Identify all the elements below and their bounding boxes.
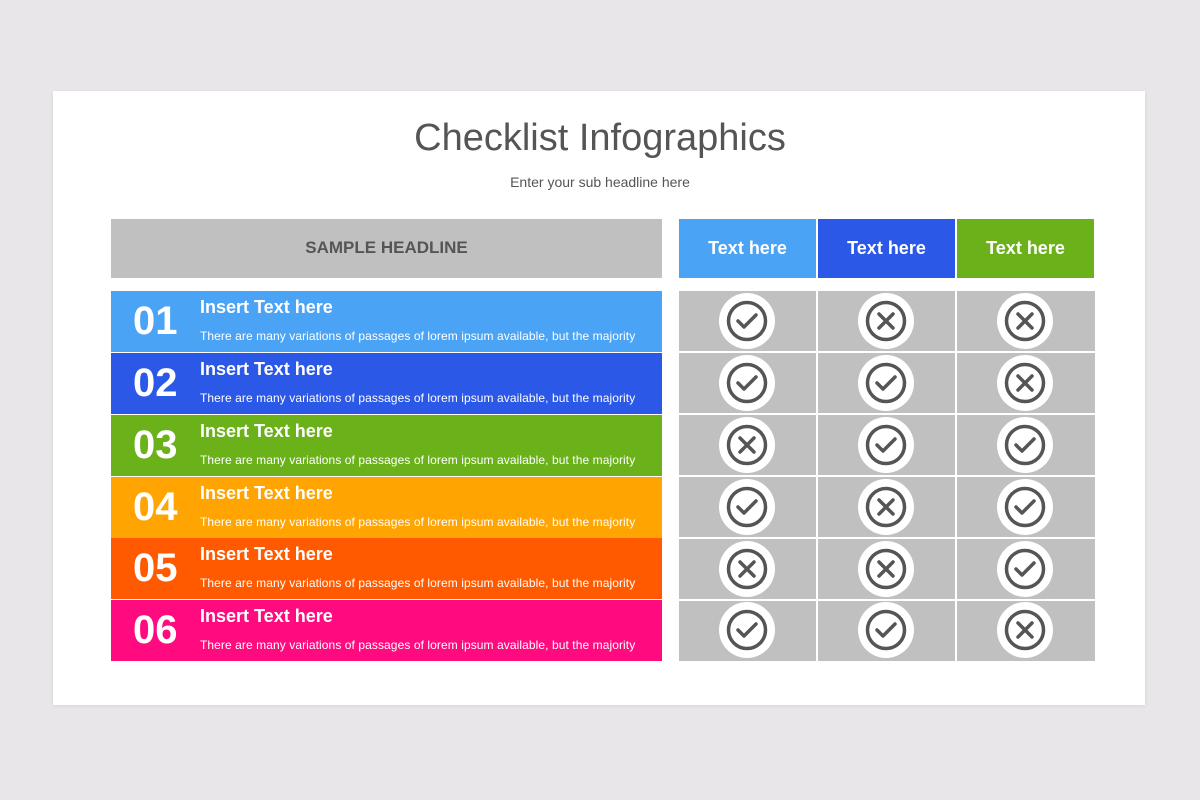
row 04: There are many variations of passages of lorem ipsum available, but the majority [200,515,635,529]
header 2: Text here [847,238,926,258]
row 01: Insert Text here [200,297,333,317]
row 05: Insert Text here [200,544,333,564]
icons row 5 [719,541,1053,597]
row 05: 05 [133,546,178,590]
title: Checklist Infographics [414,117,786,159]
row 03 [111,415,662,476]
row 01: There are many variations of passages of lorem ipsum available, but the majority [200,329,635,343]
row 02: 02 [133,361,178,405]
checklist grid [679,291,1095,661]
icons row 1 [719,293,1053,349]
row 04: Insert Text here [200,483,333,503]
row 06: 06 [133,608,178,652]
row 01 [111,291,662,352]
row 05 [111,538,662,599]
row 03: There are many variations of passages of lorem ipsum available, but the majority [200,453,635,467]
column headers [679,219,1094,278]
icons row 3 [719,417,1053,473]
icons row 4 [719,479,1053,535]
header 1: Text here [708,238,787,258]
row 04 [111,477,662,538]
header 3: Text here [986,238,1065,258]
row 04: 04 [133,485,178,529]
row 06 [111,600,662,661]
card [53,91,1145,705]
row 05: There are many variations of passages of lorem ipsum available, but the majority [200,576,635,590]
left header [111,219,662,278]
row 06: Insert Text here [200,606,333,626]
row 06: There are many variations of passages of lorem ipsum available, but the majority [200,638,635,652]
row 01: 01 [133,299,178,343]
row 03: Insert Text here [200,421,333,441]
icons row 6 [719,602,1053,658]
row 02: Insert Text here [200,359,333,379]
icons row 2 [719,355,1053,411]
header 1 [679,219,816,278]
left header: SAMPLE HEADLINE [305,238,468,257]
header 3 [957,219,1094,278]
row 02: There are many variations of passages of lorem ipsum available, but the majority [200,391,635,405]
row 03: 03 [133,423,178,467]
header 2 [818,219,955,278]
row 02 [111,353,662,414]
subtitle: Enter your sub headline here [510,174,690,190]
